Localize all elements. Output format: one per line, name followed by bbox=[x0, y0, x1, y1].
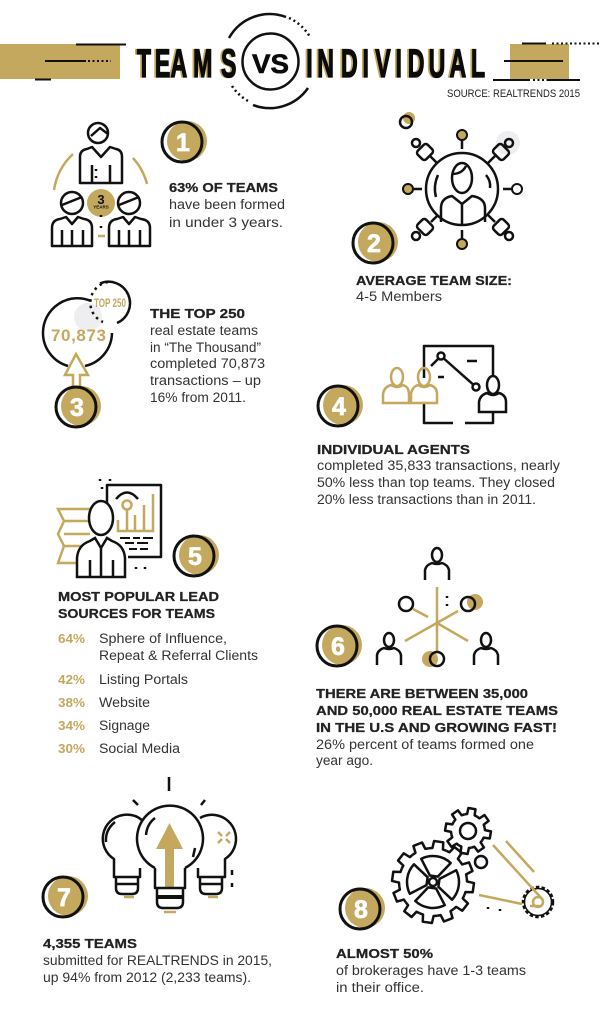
icon: three team members bbox=[52, 123, 150, 246]
badge 6 bbox=[317, 625, 362, 666]
icon: top 250 circles: 70,873 bbox=[51, 326, 106, 345]
text block 3: completed 70,873 bbox=[150, 356, 265, 371]
badge 7 bbox=[43, 876, 88, 917]
text block 7: 4,355 TEAMS bbox=[43, 937, 137, 951]
lead sources list: Listing Portals bbox=[99, 672, 188, 687]
icon: top 250 circles: TOP 250 bbox=[94, 296, 126, 310]
badge 3 bbox=[56, 386, 101, 427]
badge 7: 7 bbox=[57, 884, 71, 912]
text block 6: IN THE U.S AND GROWING FAST! bbox=[316, 721, 557, 735]
vs emblem: VS bbox=[252, 49, 289, 79]
badge 1: 1 bbox=[176, 129, 190, 157]
text block 4: 50% less than top teams. They closed bbox=[317, 475, 555, 490]
lead sources list: 64% bbox=[58, 631, 85, 646]
text block 4 bbox=[317, 443, 560, 507]
title: individual: INDIVIDUAL bbox=[306, 40, 485, 86]
text block 8: of brokerages have 1-3 teams bbox=[336, 963, 526, 978]
badge 2: 2 bbox=[367, 230, 381, 258]
icon: team size network bbox=[400, 112, 522, 249]
lead sources list: Signage bbox=[99, 718, 150, 733]
text block 4: 20% less transactions than in 2011. bbox=[317, 492, 536, 507]
text block 2: AVERAGE TEAM SIZE: bbox=[356, 274, 512, 288]
icon: team network bbox=[377, 548, 498, 667]
text block 3: transactions – up bbox=[150, 373, 261, 388]
icon: gears bbox=[387, 805, 553, 928]
title: teams: TEAMS bbox=[137, 40, 236, 86]
text block 6: AND 50,000 REAL ESTATE TEAMS bbox=[316, 704, 558, 718]
text block 7: up 94% from 2012 (2,233 teams). bbox=[43, 970, 251, 985]
badge 5: 5 bbox=[188, 543, 202, 571]
lead sources list: Repeat & Referral Clients bbox=[99, 648, 258, 663]
lead sources list bbox=[58, 631, 258, 756]
badge 3: 3 bbox=[70, 394, 84, 422]
text block 2: 4-5 Members bbox=[356, 289, 442, 304]
icon: individual agents and board bbox=[383, 346, 506, 423]
text block 4: INDIVIDUAL AGENTS bbox=[317, 443, 470, 457]
text block 3: THE TOP 250 bbox=[150, 307, 245, 321]
text block 8 bbox=[336, 947, 526, 995]
lead sources list: Social Media bbox=[99, 741, 181, 756]
badge 4 bbox=[318, 385, 363, 426]
text block 8: ALMOST 50% bbox=[336, 947, 433, 961]
text block 3 bbox=[150, 307, 265, 405]
text block 3: real estate teams bbox=[150, 323, 258, 338]
icon: light bulbs with arrow bbox=[103, 777, 236, 912]
text block 4: completed 35,833 transactions, nearly bbox=[317, 458, 560, 473]
vs emblem bbox=[229, 14, 310, 108]
badge 8: 8 bbox=[354, 896, 368, 924]
badge 5 bbox=[174, 535, 219, 576]
text block 5: heading bbox=[58, 590, 219, 621]
lead sources list: 42% bbox=[58, 672, 85, 687]
source line: SOURCE: REALTRENDS 2015 bbox=[447, 88, 580, 100]
text block 1: have been formed bbox=[169, 197, 285, 212]
badge 1 bbox=[162, 121, 207, 162]
text block 3: 16% from 2011. bbox=[150, 390, 246, 405]
lead sources list: 34% bbox=[58, 718, 85, 733]
header band: left decoration bbox=[0, 44, 126, 80]
lead sources list: 38% bbox=[58, 695, 85, 710]
lead sources list: 30% bbox=[58, 741, 85, 756]
icon: three team members: 3 bbox=[97, 192, 105, 207]
text block 5: heading: SOURCES FOR TEAMS bbox=[58, 607, 215, 621]
text block 5: heading: MOST POPULAR LEAD bbox=[58, 590, 219, 604]
title: individual: INDIVIDUAL bbox=[304, 40, 483, 86]
text block 6 bbox=[316, 687, 558, 768]
badge 4: 4 bbox=[332, 393, 346, 421]
text block 6: year ago. bbox=[316, 753, 373, 768]
text block 3: in “The Thousand” bbox=[150, 340, 261, 355]
text block 2 bbox=[356, 274, 512, 304]
badge 6: 6 bbox=[331, 633, 345, 661]
badge 2 bbox=[353, 222, 398, 263]
text block 6: THERE ARE BETWEEN 35,000 bbox=[316, 687, 528, 701]
text block 7: submitted for REALTRENDS in 2015, bbox=[43, 953, 272, 968]
icon: three team members: YEARS bbox=[93, 204, 109, 210]
header band: right decoration bbox=[493, 44, 600, 80]
badge 8 bbox=[340, 888, 385, 929]
lead sources list: Website bbox=[99, 695, 150, 710]
text block 1: in under 3 years. bbox=[169, 215, 283, 230]
text block 7 bbox=[43, 937, 272, 985]
text block 8: in their office. bbox=[336, 980, 424, 995]
text block 6: 26% percent of teams formed one bbox=[316, 737, 534, 752]
text block 1: 63% OF TEAMS bbox=[169, 181, 278, 195]
icon: lead sources presenter bbox=[58, 479, 161, 577]
icon: top 250 circles bbox=[43, 282, 130, 386]
title: teams: TEAMS bbox=[135, 40, 235, 86]
text block 1 bbox=[169, 181, 285, 230]
lead sources list: Sphere of Influence, bbox=[99, 631, 227, 646]
